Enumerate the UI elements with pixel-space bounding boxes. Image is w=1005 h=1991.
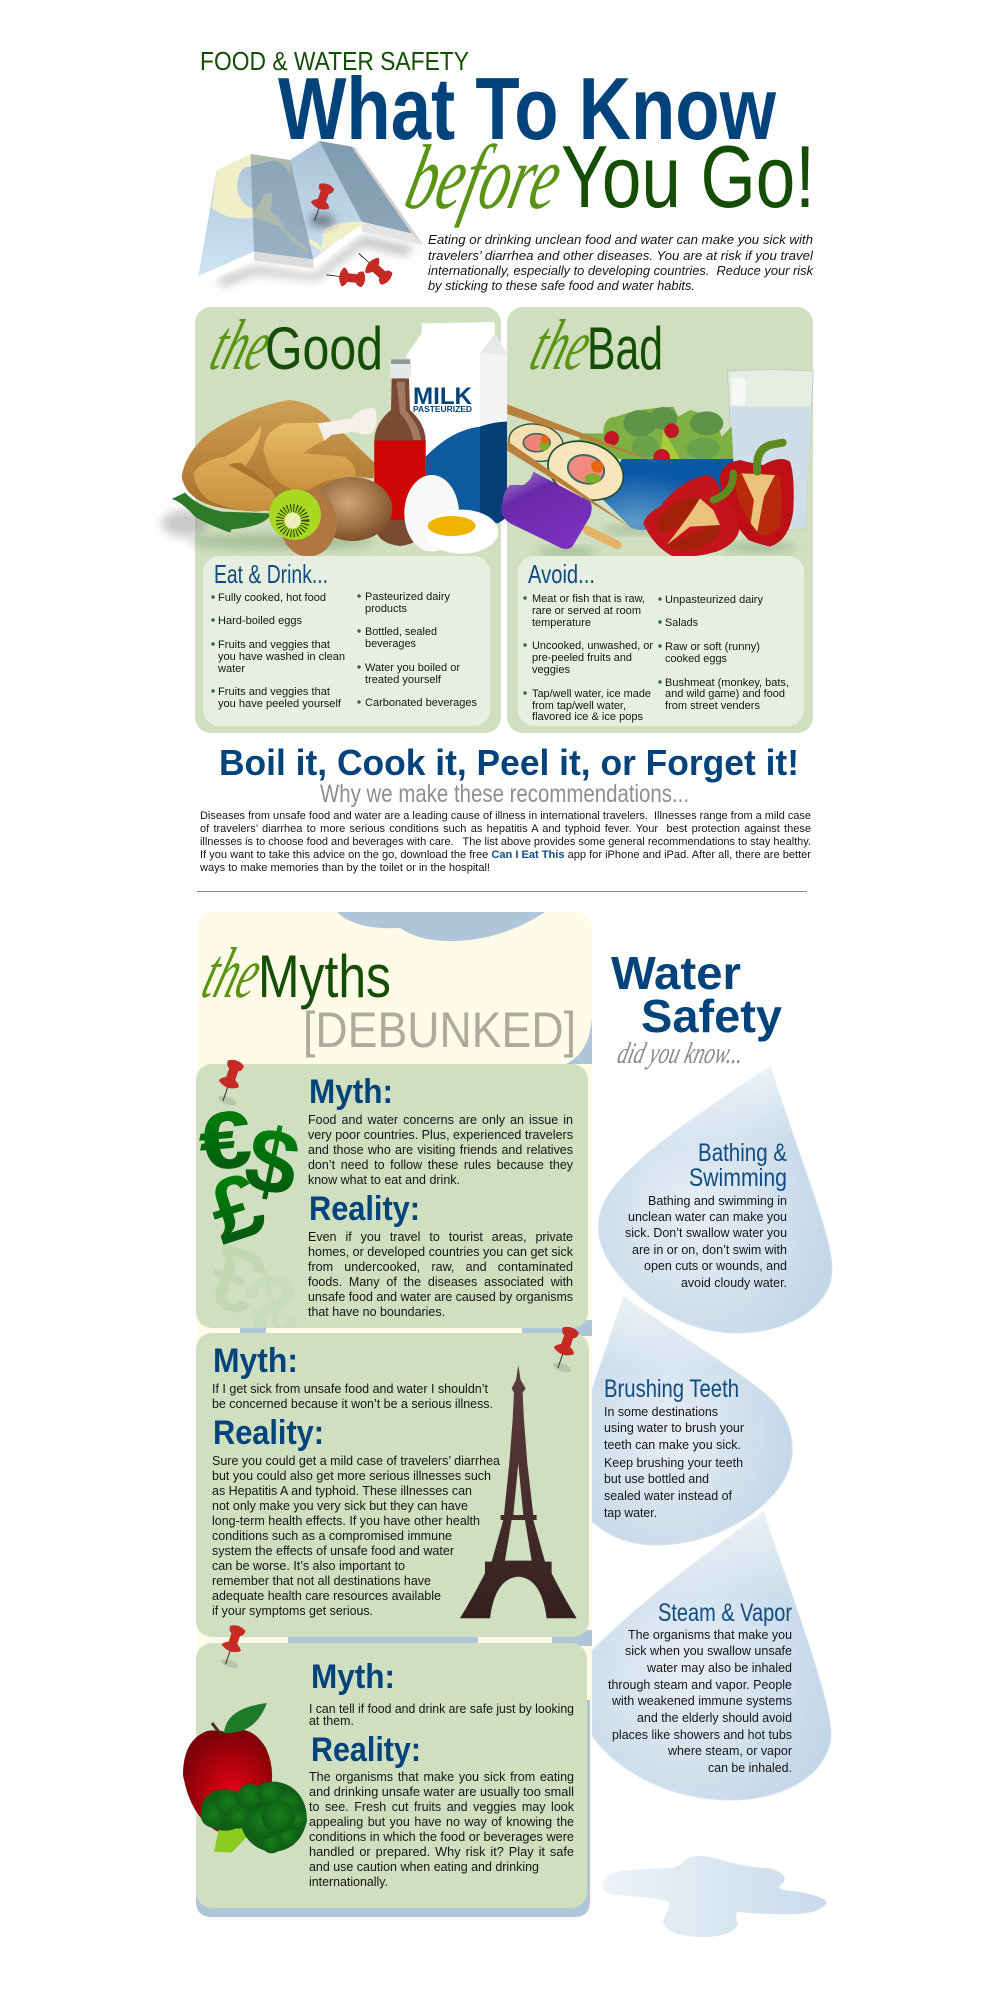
heading: Boil it, Cook it, Peel it, or Forget it!: Boil it, Cook it, Peel it, or Forget it! bbox=[219, 742, 799, 783]
water drop text: Steam and Vapor: with weakened immune systems bbox=[611, 1694, 792, 1708]
text: reality 2: as Hepatitis A and typhoid. These illnesses can bbox=[212, 1484, 472, 1498]
illustration: chicken bbox=[162, 400, 377, 549]
heading: Water Safety bbox=[611, 947, 782, 1042]
icon: currency symbols: £ bbox=[197, 1154, 276, 1264]
box: Avoid list: flavored ice & ice pops bbox=[532, 711, 644, 723]
water drop text: Brushing Teeth: tap water. bbox=[604, 1506, 657, 1520]
water drop text: Bathing and Swimming: sick. Don’t swallow water you bbox=[625, 1226, 787, 1240]
water drop text: Steam and Vapor: and the elderly should avoid bbox=[637, 1711, 792, 1725]
heading: Debunked: [DEBUNKED] bbox=[303, 1002, 576, 1058]
icon: currency symbols: £ bbox=[197, 1224, 276, 1334]
heading: the Myths bbox=[194, 933, 391, 1013]
panel: the Good bbox=[162, 305, 508, 733]
box: Eat and Drink list: Pasteurized dairy bbox=[365, 591, 450, 603]
subheading: did you know: did you know... bbox=[614, 1036, 748, 1070]
box: Eat and Drink list: Hard-boiled eggs bbox=[218, 615, 302, 627]
box: Avoid list: Unpasteurized dairy bbox=[665, 594, 763, 606]
water drop text: Brushing Teeth bbox=[604, 1375, 744, 1520]
heading: the Good: Good bbox=[265, 315, 383, 382]
box: Avoid list: veggies bbox=[532, 664, 570, 676]
heading: Reality: Reality: bbox=[309, 1190, 420, 1228]
text: reality 3: conditions in which the food or beverages were bbox=[309, 1830, 574, 1844]
water drop text: Bathing and Swimming: open cuts or wounds, and bbox=[644, 1259, 787, 1273]
panel: myth 1 bbox=[196, 1064, 588, 1328]
text: myth 1: and those who are visiting friends and relatives bbox=[308, 1143, 573, 1157]
text: reality 3: The organisms that make you sick from eating bbox=[309, 1770, 574, 1784]
box: Eat and Drink list: Fruits and veggies that bbox=[218, 639, 330, 651]
heading: Myth: Myth: bbox=[213, 1342, 298, 1380]
text: reality 2: system the effects of unsafe food and water bbox=[212, 1544, 454, 1558]
heading: the Bad: Bad bbox=[587, 315, 663, 382]
title: before: before bbox=[397, 127, 572, 229]
box: Eat and Drink list: treated yourself bbox=[365, 674, 442, 686]
text: reality 1: homes, or developed countries you can get sick bbox=[308, 1245, 574, 1259]
text: reality 1: unsafe food and water are caused by organisms bbox=[308, 1290, 573, 1304]
water drop text: Brushing Teeth: teeth can make you sick. bbox=[604, 1438, 741, 1452]
box: Avoid list: Uncooked, unwashed, or bbox=[532, 640, 653, 652]
heading: Myth: Myth: bbox=[311, 1658, 395, 1696]
water drop text: Brushing Teeth: Keep brushing your teeth bbox=[604, 1456, 743, 1470]
heading: Reality: Reality: bbox=[311, 1731, 421, 1769]
text: myth 1: don’t need to follow these rules because they bbox=[308, 1158, 574, 1172]
heading: the Myths: Myths bbox=[258, 943, 391, 1010]
text: myth 1: Food and water concerns are only an issue in bbox=[308, 1113, 573, 1127]
text: reality 2: but you could also get more serious illnesses such bbox=[212, 1469, 491, 1483]
text: reality 3: and use caution when eating and drinking bbox=[309, 1860, 539, 1874]
icon: currency symbols: $ bbox=[237, 1251, 308, 1361]
box: Avoid list: and wild game) and food bbox=[665, 688, 785, 700]
icon: broccoli bbox=[201, 1782, 307, 1853]
illustration: bottle bbox=[374, 358, 426, 546]
box: Eat and Drink list: Eat & Drink... bbox=[214, 559, 328, 589]
box: Avoid list: Salads bbox=[665, 617, 698, 629]
intro text: Eating or drinking unclean food and water can make you sick with bbox=[428, 233, 813, 247]
illustration: glass of water bbox=[728, 370, 813, 530]
text block: recommendations: Diseases from unsafe food and water are a leading cause of illness in international travelers. Illnesses range from a mild case bbox=[200, 810, 811, 822]
water drop text: Bathing and Swimming bbox=[625, 1139, 787, 1290]
box: Avoid list: Raw or soft (runny) bbox=[665, 641, 760, 653]
box: Avoid list: Meat or fish that is raw, bbox=[532, 593, 645, 605]
box: Avoid list: cooked eggs bbox=[665, 653, 727, 665]
text: reality 1: from undercooked, raw, and contaminated bbox=[308, 1260, 573, 1274]
water drop: Steam and Vapor background bbox=[585, 1512, 831, 1800]
box: Avoid list: temperature bbox=[532, 617, 591, 629]
text: reality 3: and drinking unsafe water are usually too small bbox=[309, 1785, 574, 1799]
text: reality 1: that have no boundaries. bbox=[308, 1305, 445, 1319]
label: milk: MILK bbox=[413, 383, 473, 410]
illustration: puddle bbox=[602, 1856, 827, 1937]
icon: Eiffel Tower bbox=[460, 1365, 577, 1618]
illustration: milk carton bbox=[407, 322, 508, 523]
text: myth 1 bbox=[308, 1113, 574, 1187]
box: Avoid list: rare or served at room bbox=[532, 605, 641, 617]
text: reality 3: appealing but you have no way of knowing the bbox=[309, 1815, 574, 1829]
panel: myth 2 bbox=[196, 1333, 589, 1637]
heading: the Bad: the bbox=[522, 305, 602, 385]
heading: Water Safety: Water bbox=[611, 947, 741, 999]
box: Eat and Drink list: you have peeled yourself bbox=[218, 698, 342, 710]
text: myth 3: at them. bbox=[309, 1714, 354, 1728]
text: myth 3: I can tell if food and drink are safe just by looking bbox=[309, 1702, 574, 1716]
water drop text: Bathing and Swimming: Bathing & bbox=[698, 1139, 787, 1167]
heading: Food & Water Safety: FOOD & WATER SAFETY bbox=[200, 46, 469, 76]
text block: recommendations: ways to make memories than by the toilet or in the hospital! bbox=[199, 862, 490, 874]
box: Avoid list: Tap/well water, ice made bbox=[532, 688, 651, 700]
text: myth 1: know what to eat and drink. bbox=[308, 1173, 460, 1187]
panel: the Bad bbox=[501, 305, 813, 733]
label: milk: PASTEURIZED bbox=[413, 405, 472, 414]
illustration: ice pop bbox=[501, 472, 617, 555]
text block: recommendations: illnesses is to choose food and beverages with care. The list above provides some general recommendations to stay healthy. bbox=[200, 836, 811, 848]
panel: myth 3 bbox=[183, 1643, 587, 1908]
heading: the Myths: the bbox=[194, 933, 272, 1013]
text: reality 3: handled or prepared. Why risk it? Play it safe bbox=[309, 1845, 574, 1859]
intro text: by sticking to these safe food and water habits. bbox=[428, 279, 695, 293]
intro text: travelers’ diarrhea and other diseases. You are at risk if you travel bbox=[428, 249, 814, 263]
water drop text: Steam and Vapor: sick when you swallow unsafe bbox=[625, 1644, 792, 1658]
water drop text: Bathing and Swimming: avoid cloudy water. bbox=[681, 1276, 787, 1290]
box: Eat and Drink list: Bottled, sealed bbox=[365, 626, 437, 638]
box: Eat and Drink list: beverages bbox=[365, 638, 416, 650]
box: Eat and Drink list: water bbox=[217, 663, 245, 675]
text: reality 1: foods. Many of the diseases associated with bbox=[308, 1275, 573, 1289]
text: reality 2: not only make you very sick but they can have bbox=[212, 1499, 468, 1513]
box: Eat and Drink list: Fully cooked, hot food bbox=[218, 592, 326, 604]
intro text bbox=[428, 233, 814, 293]
text: reality 3: internationally. bbox=[309, 1875, 388, 1889]
text: reality 3 bbox=[309, 1770, 575, 1889]
box: Avoid list: from street venders bbox=[665, 700, 760, 712]
water drop text: Brushing Teeth: using water to brush your bbox=[604, 1421, 744, 1435]
heading: Water Safety: Safety bbox=[641, 990, 782, 1042]
water drop text: Bathing and Swimming: Bathing and swimming in bbox=[648, 1194, 787, 1208]
box: Avoid list: Bushmeat (monkey, bats, bbox=[665, 677, 789, 689]
water drop text: Bathing and Swimming: Swimming bbox=[689, 1164, 787, 1192]
text block: recommendations bbox=[199, 810, 811, 874]
water drop text: Bathing and Swimming: unclean water can make you bbox=[628, 1210, 787, 1224]
water drop text: Steam and Vapor: Steam & Vapor bbox=[658, 1599, 792, 1627]
title: What To Know: What To Know bbox=[278, 59, 776, 158]
icon: push pin 3 bbox=[216, 1623, 251, 1670]
icon: apple bbox=[183, 1703, 272, 1834]
heading: Myth: Myth: bbox=[309, 1073, 393, 1111]
water drop text: Brushing Teeth: but use bottled and bbox=[604, 1472, 709, 1486]
illustration: eggs bbox=[404, 475, 498, 554]
box: Eat and Drink list: Fruits and veggies that bbox=[218, 686, 330, 698]
text: reality 2: long-term health effects. If you have other health bbox=[212, 1514, 480, 1528]
water drop text: Bathing and Swimming: are in or on, don’t swim with bbox=[632, 1243, 787, 1257]
text: reality 2: if your symptoms get serious. bbox=[212, 1604, 373, 1618]
illustration: sushi and chopsticks bbox=[506, 404, 660, 529]
illustration: bowl bbox=[603, 459, 733, 533]
heading: the Good bbox=[202, 305, 383, 385]
water drop text: Brushing Teeth: Brushing Teeth bbox=[604, 1375, 739, 1403]
box: Avoid list: pre-peeled fruits and bbox=[532, 652, 632, 664]
text: reality 1: Even if you travel to tourist areas, private bbox=[308, 1230, 573, 1244]
text: reality 2: conditions such as a compromised immune bbox=[212, 1529, 452, 1543]
water drop text: Brushing Teeth: sealed water instead of bbox=[604, 1489, 733, 1503]
icon: push pin 1 bbox=[212, 1057, 249, 1107]
water drop text: Steam and Vapor: places like showers and hot tubs bbox=[612, 1728, 792, 1742]
text block: recommendations: If you want to take this advice on the go, download the free Can I Eat This app for iPhone and iPad. After all, there are better bbox=[200, 849, 811, 861]
water drop: Brushing Teeth background bbox=[585, 1297, 792, 1545]
text: myth 3 bbox=[309, 1702, 574, 1728]
water drop text: Steam and Vapor: through steam and vapor. People bbox=[608, 1678, 792, 1692]
title: You Go!: You Go! bbox=[561, 127, 815, 226]
water drop text: Steam and Vapor: where steam, or vapor bbox=[667, 1744, 792, 1758]
text: myth 2 bbox=[212, 1382, 493, 1411]
intro text: internationally, especially to developing countries. Reduce your risk bbox=[428, 264, 814, 278]
water drop: Bathing and Swimming background bbox=[598, 1067, 832, 1333]
water drop text: Steam and Vapor: The organisms that make you bbox=[628, 1628, 792, 1642]
box: Eat and Drink list: products bbox=[365, 603, 407, 615]
text: reality 2: Sure you could get a mild case of travelers’ diarrhea bbox=[212, 1454, 500, 1468]
text: reality 2: remember that not all destinations have bbox=[212, 1574, 431, 1588]
heading: the Good: the bbox=[202, 305, 282, 385]
icon: currency symbols: € bbox=[196, 1094, 254, 1188]
water drop text: Brushing Teeth: In some destinations bbox=[604, 1405, 718, 1419]
box: Avoid list: Avoid... bbox=[528, 559, 595, 589]
box: Avoid list bbox=[518, 556, 804, 726]
text: reality 2: can be worse. It’s also important to bbox=[212, 1559, 405, 1573]
box: Eat and Drink list: Carbonated beverages bbox=[365, 697, 477, 709]
icon: currency symbols bbox=[199, 1111, 298, 1312]
text: myth 2: If I get sick from unsafe food and water I shouldn’t bbox=[212, 1382, 489, 1396]
box: Eat and Drink list: Water you boiled or bbox=[365, 662, 460, 674]
text: reality 2 bbox=[212, 1454, 500, 1618]
water drop text: Steam and Vapor bbox=[608, 1599, 792, 1775]
box: Avoid list: from tap/well water, bbox=[532, 700, 626, 712]
illustration: red peppers bbox=[643, 443, 797, 557]
heading: Reality: Reality: bbox=[213, 1414, 324, 1452]
water drop text: Steam and Vapor: water may also be inhaled bbox=[646, 1661, 792, 1675]
text: myth 1: very poor countries. Plus, experienced travelers bbox=[308, 1128, 573, 1142]
illustration: salad bbox=[578, 407, 733, 466]
text: reality 3: to see. Fresh cut fruits and veggies may look bbox=[309, 1800, 575, 1814]
illustration: map with pins bbox=[198, 141, 423, 289]
text: reality 1 bbox=[308, 1230, 574, 1319]
box: Eat and Drink list: you have washed in clean bbox=[218, 651, 345, 663]
water drop text: Steam and Vapor: can be inhaled. bbox=[708, 1761, 792, 1775]
box: Eat and Drink list bbox=[203, 556, 490, 726]
text: reality 2: adequate health care resources available bbox=[212, 1589, 441, 1603]
illustration: kiwi bbox=[269, 477, 392, 557]
panel: myths background bbox=[196, 912, 592, 1917]
icon: push pin 2 bbox=[547, 1324, 584, 1374]
text: myth 2: be concerned because it won’t be a serious illness. bbox=[212, 1397, 493, 1411]
subheading: Why we make these recommendations: Why we make these recommendations... bbox=[320, 780, 689, 808]
text block: recommendations: of travelers’ diarrhea to more serious conditions such as hepatitis A and typhoid fever. Your best protection against these bbox=[200, 823, 811, 835]
icon: currency symbols: $ bbox=[237, 1107, 308, 1217]
